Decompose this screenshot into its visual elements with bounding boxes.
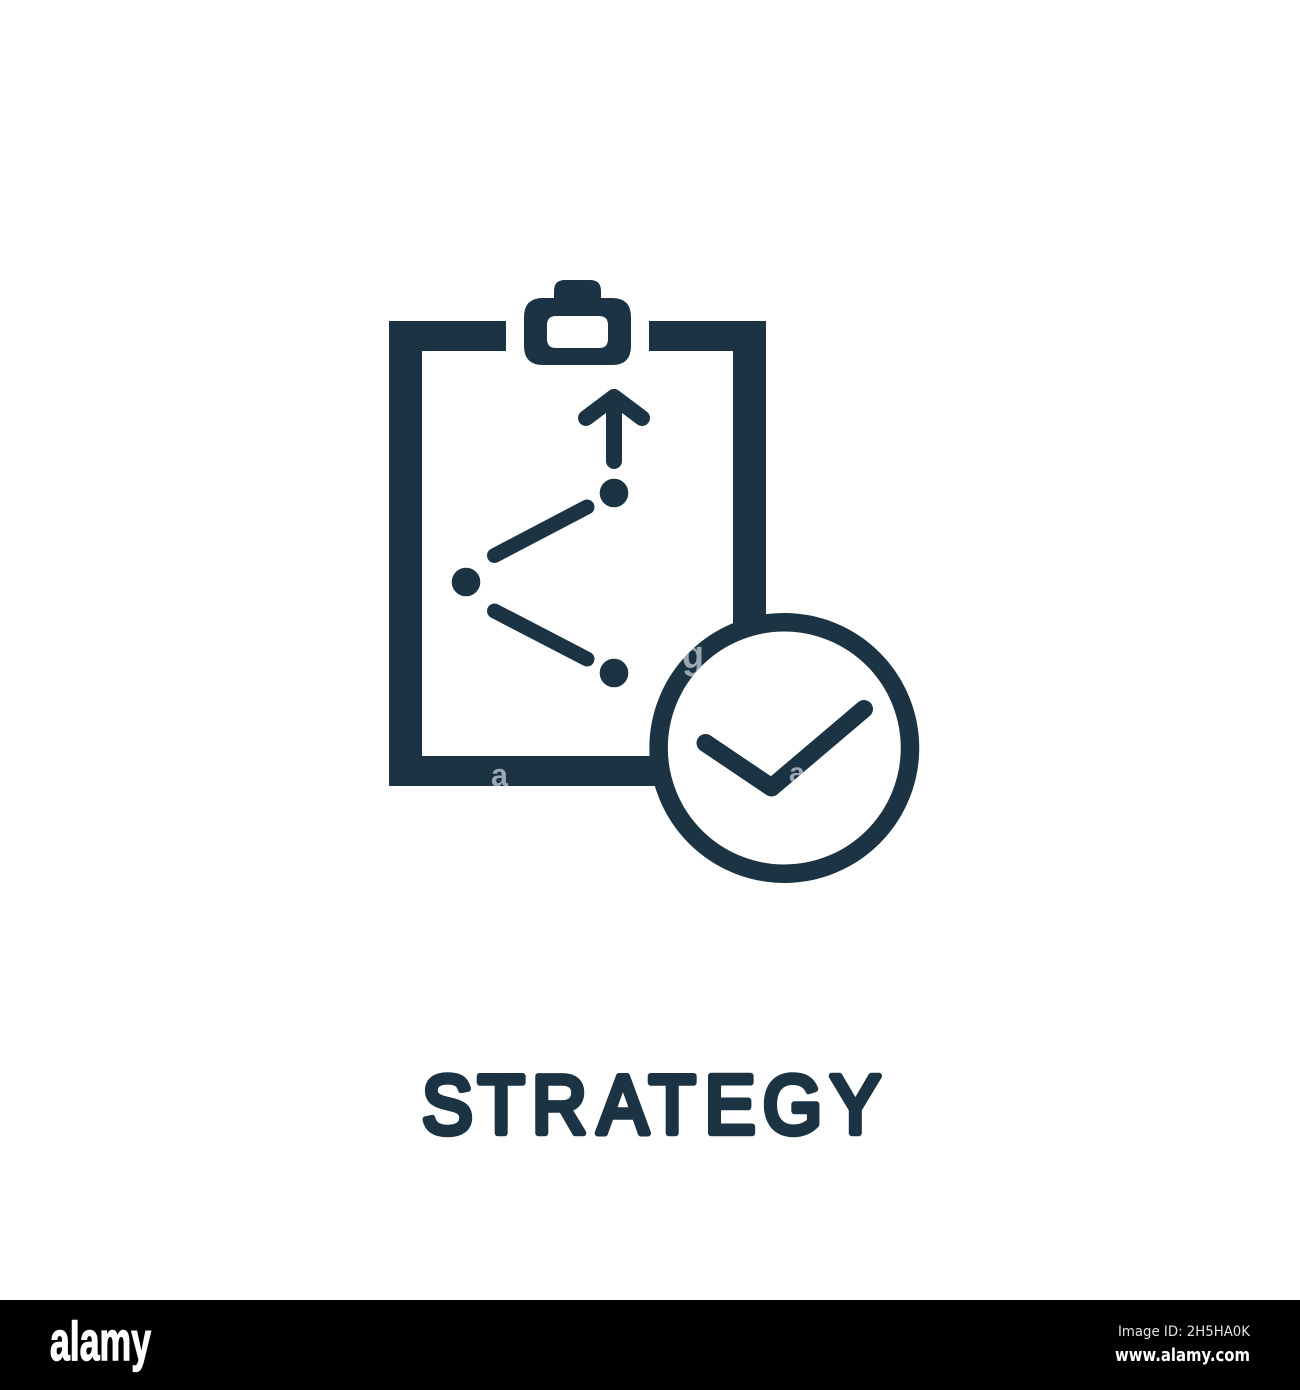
clipboard frame	[389, 321, 766, 786]
image id: Image ID: 2H5HA0K	[1118, 1324, 1251, 1340]
watermark fragments: a	[789, 757, 805, 788]
clipboard clip	[524, 280, 631, 365]
watermark fragments: g	[682, 633, 704, 677]
strategy path nodes and links	[452, 479, 628, 687]
watermark fragments	[492, 646, 803, 786]
arrow pointing up	[586, 397, 642, 461]
infographic canvas	[0, 280, 1300, 1390]
footer logo: alamy	[50, 1310, 151, 1372]
footer bar	[0, 1300, 1300, 1390]
check mark	[706, 709, 864, 788]
title: STRATEGY	[422, 1058, 881, 1151]
icon: strategy clipboard with check badge	[389, 280, 910, 874]
check badge circle	[659, 622, 910, 874]
website: www.alamy.com	[1115, 1345, 1250, 1366]
watermark fragments: a	[491, 757, 508, 793]
